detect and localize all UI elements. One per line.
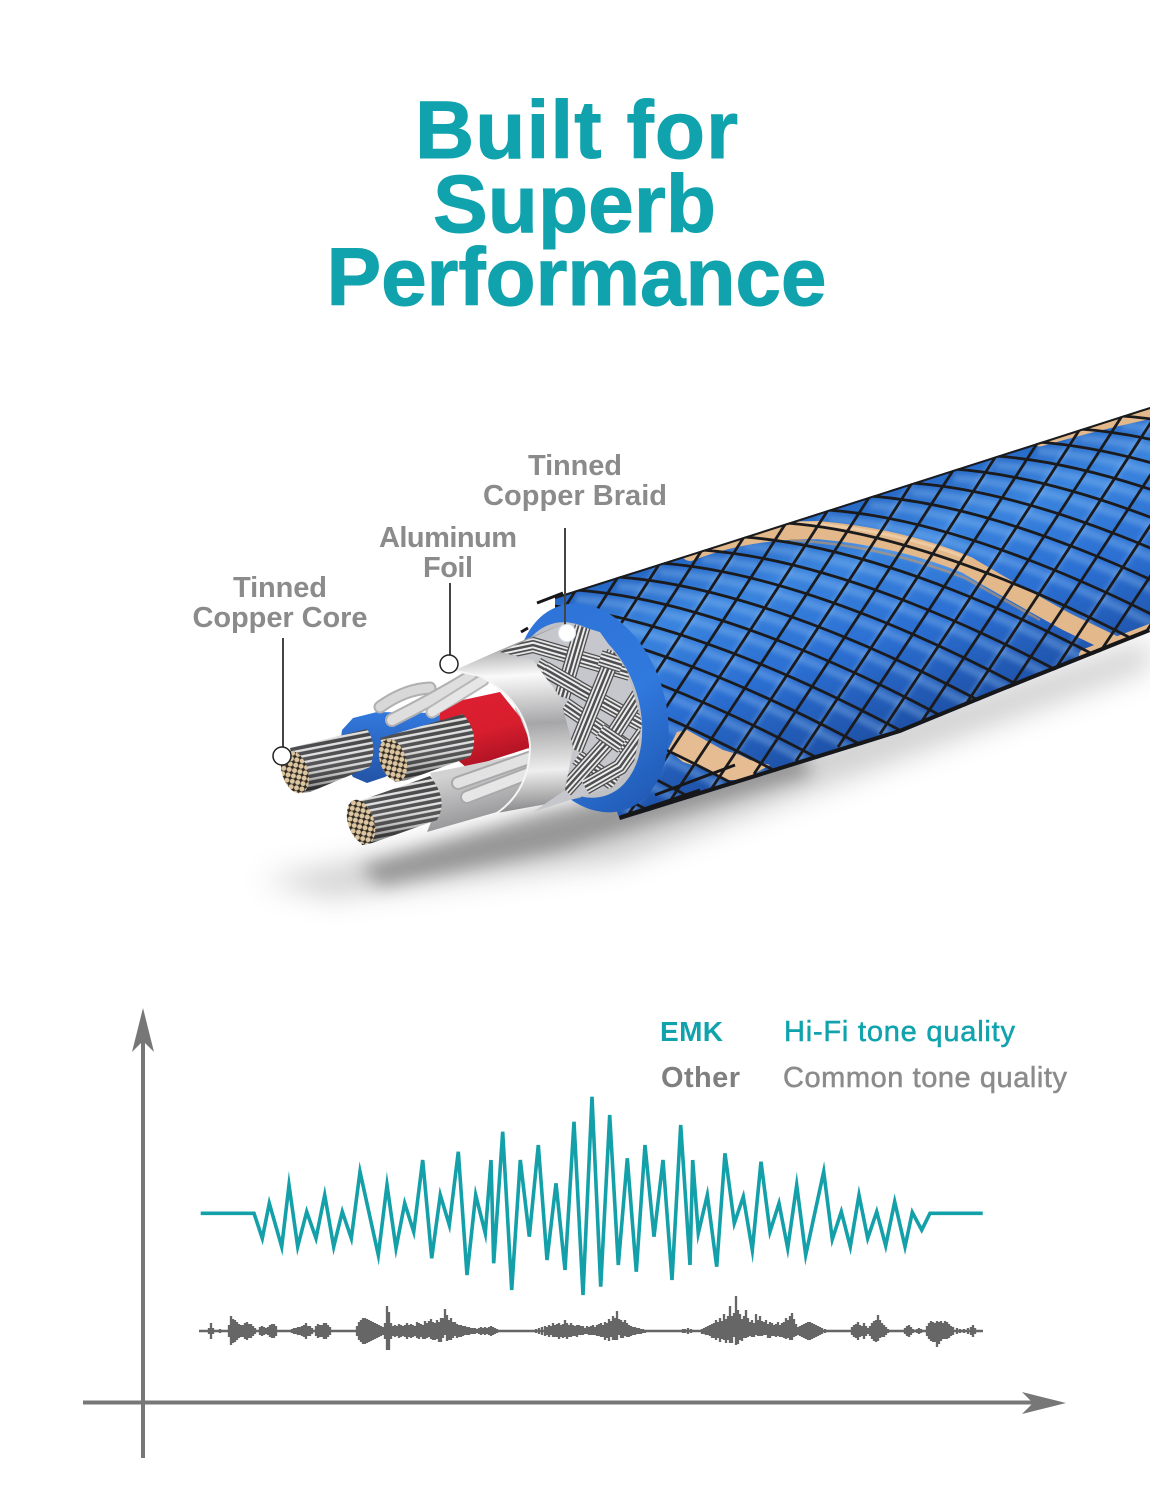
label: tinned copper braid: Tinned bbox=[528, 450, 622, 482]
cable illustration bbox=[272, 407, 1150, 908]
stranded conductor: grey core bbox=[342, 776, 442, 848]
grey wave: other bbox=[199, 1296, 983, 1350]
blue jacket bbox=[341, 712, 440, 783]
grey jacket bbox=[427, 752, 532, 832]
title: Superb bbox=[433, 159, 716, 250]
white insulated wires upper bbox=[380, 677, 483, 720]
legend: Hi-Fi tone quality bbox=[784, 1016, 1016, 1048]
title: Built for bbox=[415, 85, 738, 176]
label: tinned copper braid bbox=[483, 450, 667, 642]
label: tinned copper core: Tinned bbox=[233, 572, 327, 604]
red jacket bbox=[440, 692, 532, 768]
stranded conductor: blue core bbox=[276, 729, 373, 797]
blue ring bbox=[490, 584, 694, 832]
legend: Other bbox=[661, 1062, 740, 1094]
label: aluminum foil: Aluminum bbox=[379, 522, 517, 554]
white insulated wires lower bbox=[458, 757, 532, 797]
label: tinned copper core: Copper Core bbox=[192, 602, 368, 634]
braid shield bbox=[500, 622, 645, 812]
legend bbox=[660, 1016, 1068, 1094]
label: aluminum foil: Foil bbox=[423, 552, 473, 584]
black mesh bbox=[555, 414, 1150, 812]
mesh tail fringe bbox=[521, 593, 735, 817]
stranded conductor: red core bbox=[374, 714, 474, 785]
cable shadow bbox=[260, 640, 1150, 897]
copper strip bbox=[690, 413, 1150, 655]
title: Performance bbox=[326, 232, 826, 323]
teal wave: EMK bbox=[201, 1097, 983, 1295]
chart axes bbox=[83, 1008, 1066, 1458]
title bbox=[326, 85, 826, 323]
label: aluminum foil bbox=[379, 522, 517, 673]
foil lip bbox=[456, 671, 530, 813]
label: tinned copper braid: Copper Braid bbox=[483, 480, 667, 512]
legend: Common tone quality bbox=[783, 1062, 1068, 1094]
legend: EMK bbox=[660, 1016, 723, 1047]
foil shield bbox=[455, 625, 630, 813]
label: tinned copper core bbox=[192, 572, 368, 765]
cable body with mesh bbox=[555, 407, 1150, 820]
ring opening bbox=[493, 606, 663, 814]
